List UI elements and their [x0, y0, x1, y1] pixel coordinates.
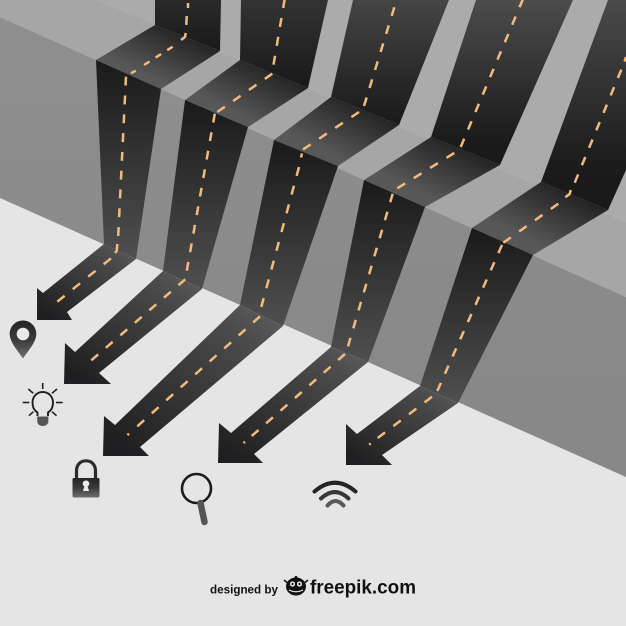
footer credit: [210, 576, 416, 598]
road 5: [346, 0, 626, 465]
road 4: [218, 0, 573, 463]
icon: magnifying glass: [182, 474, 211, 522]
road 3 centre line: [127, 7, 394, 435]
wall top surface: [0, 0, 626, 297]
road 2: [64, 0, 328, 384]
road 4 centre line: [244, 0, 523, 443]
arrow 3: [103, 305, 283, 456]
designed by text: designed by: [210, 582, 278, 596]
icon: padlock: [72, 461, 100, 498]
arrow 4: [218, 347, 368, 463]
road 2 centre line: [91, 0, 285, 360]
wall front face: [0, 17, 626, 477]
icon: wifi: [314, 483, 356, 506]
road 1: [37, 0, 221, 320]
arrow 1: [37, 244, 136, 320]
icon: location pin: [10, 320, 36, 358]
freepik.com text: freepik.com: [310, 578, 416, 598]
arrow 5: [346, 386, 458, 465]
icon: freepik mascot: [284, 576, 308, 596]
icon: light bulb: [23, 383, 63, 426]
road 1 centre line: [57, 3, 188, 302]
arrow 2: [64, 271, 202, 384]
road 3: [103, 0, 449, 456]
road 5 centre line: [369, 57, 626, 445]
